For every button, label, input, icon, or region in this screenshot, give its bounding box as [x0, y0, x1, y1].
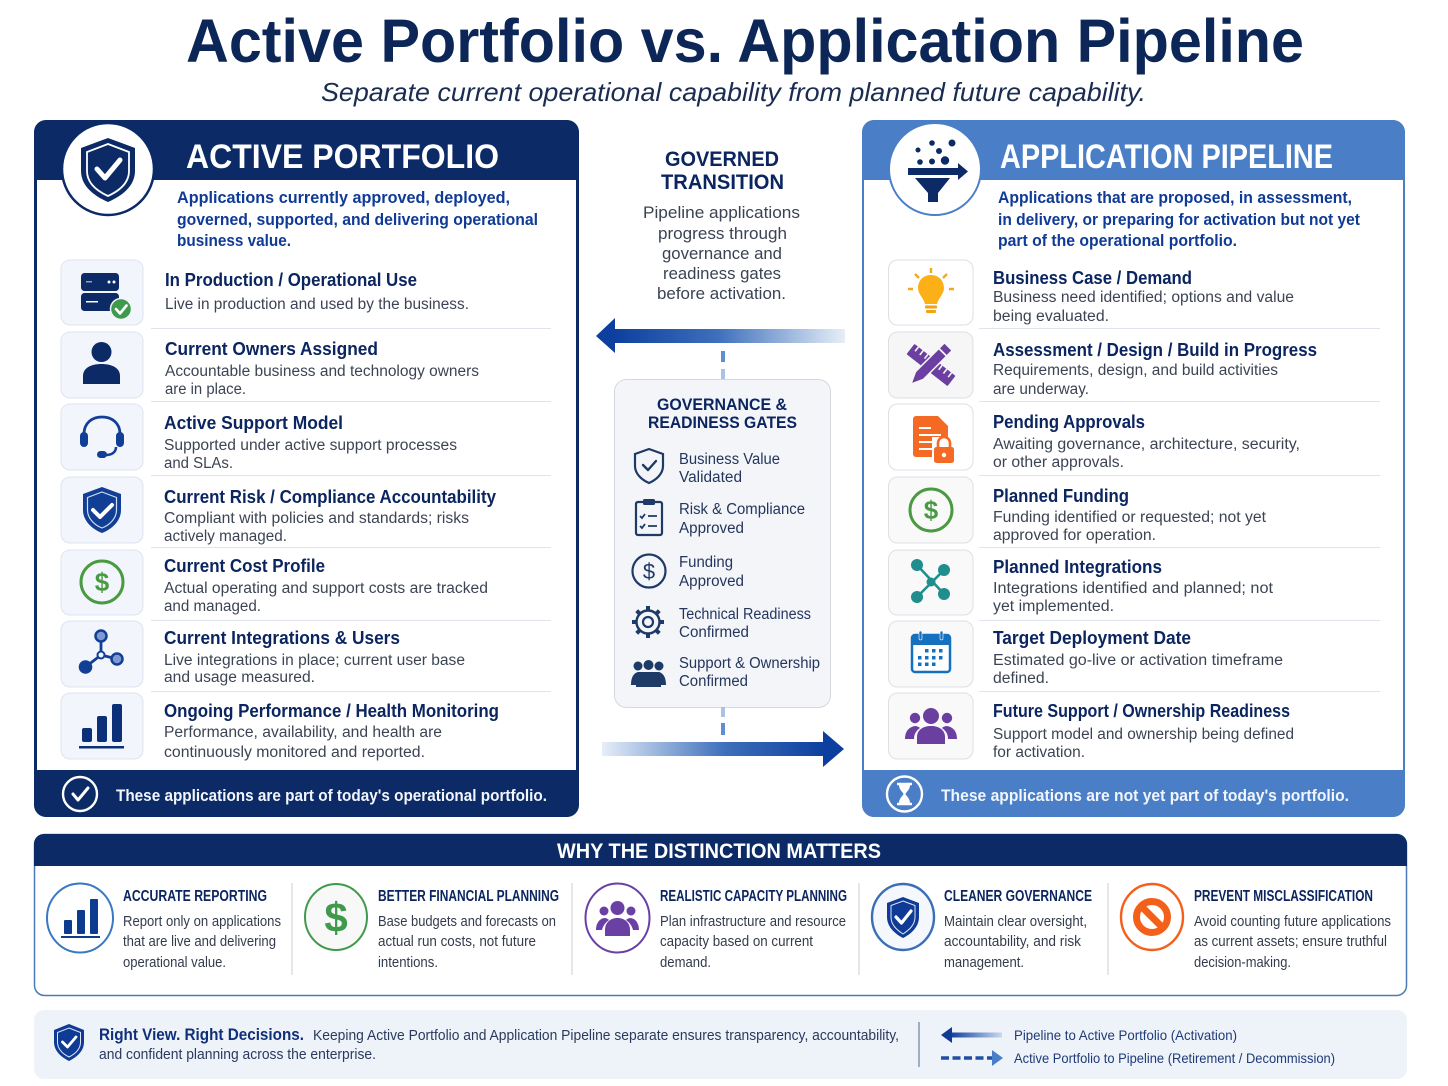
gate: funding: [632, 554, 744, 590]
heading: application pipeline: APPLICATION PIPELINE: [1000, 138, 1333, 176]
icon: document lock: [913, 416, 956, 464]
item: realistic capacity planning: demand.: [660, 955, 711, 971]
item: better financial planning: intentions.: [378, 955, 438, 971]
icon: shield badge: [62, 123, 154, 215]
row: performance: Performance, availability, and health are: [164, 724, 442, 741]
heading: governed transition: [661, 147, 784, 194]
item: cleaner governance: CLEANER GOVERNANCE: [944, 888, 1092, 905]
row: assessment design build: are underway.: [993, 381, 1089, 398]
row: assessment design build: Requirements, design, and build activities: [993, 362, 1278, 379]
panel: governance gates: [614, 380, 830, 708]
row: future support: [888, 693, 1294, 761]
row: current owners: [61, 332, 479, 398]
item: realistic capacity planning: Plan infrastructure and resource: [660, 914, 846, 930]
icon: footer shield: [54, 1024, 84, 1061]
row: risk compliance: actively managed.: [164, 528, 287, 545]
row: planned integrations: Integrations identified and planned; not: [993, 580, 1274, 597]
arrow: pipeline to active portfolio: [596, 318, 845, 353]
text: transition description: [643, 204, 800, 303]
row: business case: being evaluated.: [993, 308, 1109, 325]
gate: technical readiness: Technical Readiness: [679, 606, 811, 623]
panel: application pipeline: [862, 120, 1405, 817]
row: future support: Future Support / Ownership Readiness: [993, 701, 1290, 721]
icon: dollar: [910, 489, 952, 531]
row: performance: [61, 693, 499, 761]
gate: business value: Business Value: [679, 451, 780, 468]
row: in production: Live in production and used by the business.: [165, 296, 469, 313]
row: risk compliance: [61, 477, 496, 545]
item: prevent misclassification: PREVENT MISCLASSIFICATION: [1194, 888, 1373, 905]
text: right view statement: and confident planning across the enterprise.: [99, 1047, 376, 1063]
gate: risk compliance: [636, 499, 805, 537]
row: active support: [61, 404, 457, 472]
gate: funding: Approved: [679, 573, 744, 590]
heading: governed transition: GOVERNED: [665, 147, 779, 171]
icon: light bulb: [908, 268, 954, 313]
text: active portfolio definition: Applications currently approved, deployed,: [177, 189, 510, 207]
row: business case: [888, 260, 1294, 325]
item: better financial planning: Base budgets and forecasts on: [378, 914, 556, 930]
row: planned funding: approved for operation.: [993, 527, 1156, 544]
arrow: active portfolio to pipeline: [602, 731, 844, 767]
connector: bottom dashes: [721, 707, 725, 735]
gate: risk compliance: Risk & Compliance: [679, 501, 805, 518]
row: integrations: and usage measured.: [164, 669, 315, 686]
footer text: active portfolio: These applications are part of today's operational portfolio.: [116, 787, 547, 805]
row: performance: Ongoing Performance / Health Monitoring: [164, 701, 499, 721]
row: pending approvals: [888, 404, 1300, 471]
row: integrations: Current Integrations & Users: [164, 628, 400, 648]
item: better financial planning: actual run costs, not future: [378, 934, 536, 950]
text: transition description: progress through: [658, 225, 787, 243]
legend: retirement: Active Portfolio to Pipeline (Retirement / Decommission): [1014, 1050, 1335, 1066]
row: cost profile: and managed.: [164, 598, 261, 615]
item: accurate reporting: operational value.: [123, 955, 226, 971]
row: active support: and SLAs.: [164, 455, 233, 472]
row: assessment design build: [888, 332, 1317, 398]
row: future support: for activation.: [993, 744, 1085, 761]
icon: person: [83, 342, 120, 384]
row: planned funding: Funding identified or requested; not yet: [993, 509, 1267, 526]
icon: headset: [80, 417, 124, 458]
row: planned integrations: [888, 550, 1274, 615]
row: pending approvals: Awaiting governance, architecture, security,: [993, 436, 1300, 453]
text: active portfolio definition: governed, supported, and delivering operational: [177, 211, 538, 229]
row: risk compliance: Current Risk / Compliance Accountability: [164, 487, 496, 507]
row: target deployment: Estimated go-live or activation timeframe: [993, 652, 1283, 669]
row: integrations: [61, 621, 465, 687]
gate: funding: $: [643, 559, 655, 584]
text: active portfolio definition: [177, 189, 538, 250]
row: planned funding: Planned Funding: [993, 486, 1129, 506]
text: application pipeline definition: part of the operational portfolio.: [998, 232, 1237, 250]
row: current owners: are in place.: [165, 381, 246, 398]
icon: hourglass: [887, 776, 922, 812]
text: application pipeline definition: Applications that are proposed, in assessment,: [998, 189, 1352, 207]
footer text: application pipeline: These applications are not yet part of today's portfolio.: [941, 787, 1349, 805]
icon: calendar: [912, 631, 950, 672]
icon: server with check: [81, 273, 132, 320]
row: target deployment: [888, 621, 1283, 687]
row: cost profile: [61, 550, 488, 615]
row: pending approvals: Pending Approvals: [993, 412, 1145, 432]
text: transition description: governance and: [662, 245, 782, 263]
icon: footer check: [63, 777, 97, 811]
row: active support: Active Support Model: [164, 413, 343, 433]
gate: technical readiness: [632, 606, 811, 641]
row: cost profile: Actual operating and support costs are tracked: [164, 580, 488, 597]
icon: dollar: [81, 561, 123, 603]
icon: dollar: $: [95, 567, 110, 597]
item: realistic capacity planning: [586, 884, 847, 971]
panel: right view footer: [34, 1010, 1407, 1079]
text: right view statement: Keeping Active Portfolio and Application Pipeline separate ensures transparency, accountability,: [313, 1028, 899, 1044]
icon: funnel badge: [889, 123, 981, 215]
text: right view statement: Right View. Right Decisions.: [99, 1026, 304, 1044]
gate: business value: [635, 449, 780, 486]
connector: top dashes: [721, 351, 725, 379]
item: better financial planning: BETTER FINANCIAL PLANNING: [378, 888, 559, 905]
gate: risk compliance: Approved: [679, 520, 744, 537]
item: better financial planning: [305, 884, 559, 971]
gate: support ownership: [631, 655, 820, 690]
row: business case: Business need identified; options and value: [993, 289, 1294, 306]
heading: active portfolio: ACTIVE PORTFOLIO: [186, 138, 499, 176]
row: planned integrations: yet implemented.: [993, 598, 1114, 615]
item: accurate reporting: [47, 884, 281, 971]
heading: why the distinction matters: WHY THE DISTINCTION MATTERS: [557, 840, 881, 863]
item: accurate reporting: ACCURATE REPORTING: [123, 888, 267, 905]
icon: dollar: $: [924, 495, 939, 525]
item: accurate reporting: that are live and delivering: [123, 934, 276, 950]
icon: network: [79, 630, 122, 674]
heading: governed transition: TRANSITION: [661, 170, 784, 194]
item: prevent misclassification: [1121, 884, 1391, 971]
item: accurate reporting: Report only on applications: [123, 914, 281, 930]
icon: teal network: [911, 559, 950, 603]
gate: business value: Validated: [679, 469, 742, 486]
row: business case: Business Case / Demand: [993, 268, 1192, 288]
heading: gates: GOVERNANCE &: [657, 396, 787, 414]
row: planned integrations: Planned Integrations: [993, 557, 1162, 577]
gate: support ownership: Support & Ownership: [679, 655, 820, 672]
row: cost profile: Current Cost Profile: [164, 556, 325, 576]
row: future support: Support model and ownership being defined: [993, 726, 1294, 743]
row: current owners: Current Owners Assigned: [165, 339, 378, 359]
item: better financial planning: $: [324, 894, 348, 941]
gate: support ownership: Confirmed: [679, 673, 748, 690]
row: target deployment: Target Deployment Date: [993, 628, 1191, 648]
heading: gates: [648, 396, 797, 432]
icon: bar chart: [79, 704, 124, 748]
icon: pencil and ruler: [907, 343, 955, 388]
heading: gates: READINESS GATES: [648, 414, 797, 432]
item: realistic capacity planning: REALISTIC CAPACITY PLANNING: [660, 888, 847, 905]
icon: purple people: [905, 708, 957, 744]
item: cleaner governance: management.: [944, 955, 1024, 971]
row: in production: [61, 260, 469, 325]
text: transition description: Pipeline applications: [643, 204, 800, 222]
subtitle: Separate current operational capability from planned future capability.: [321, 77, 1146, 107]
gate: technical readiness: Confirmed: [679, 624, 749, 641]
row: performance: continuously monitored and reported.: [164, 744, 425, 761]
item: cleaner governance: Maintain clear oversight,: [944, 914, 1087, 930]
row: active support: Supported under active support processes: [164, 437, 457, 454]
row: assessment design build: Assessment / Design / Build in Progress: [993, 340, 1317, 360]
icon: shield: [83, 487, 121, 533]
item: cleaner governance: accountability, and risk: [944, 934, 1082, 950]
row: in production: In Production / Operational Use: [165, 270, 417, 290]
text: active portfolio definition: business value.: [177, 232, 291, 250]
text: application pipeline definition: [998, 189, 1360, 250]
legend: activation: Pipeline to Active Portfolio (Activation): [1014, 1027, 1237, 1043]
item: prevent misclassification: decision-making.: [1194, 955, 1291, 971]
title: Active Portfolio vs. Application Pipeline: [186, 7, 1304, 75]
text: transition description: before activation.: [657, 285, 786, 303]
row: target deployment: defined.: [993, 670, 1049, 687]
row: risk compliance: Compliant with policies and standards; risks: [164, 510, 469, 527]
row: planned funding: [888, 477, 1267, 544]
text: right view statement: [99, 1026, 899, 1063]
row: integrations: Live integrations in place; current user base: [164, 652, 465, 669]
text: application pipeline definition: in delivery, or preparing for activation but not yet: [998, 211, 1360, 229]
item: prevent misclassification: as current assets; ensure truthful: [1194, 934, 1387, 950]
item: prevent misclassification: Avoid counting future applications: [1194, 914, 1391, 930]
panel: governed transition: [596, 147, 845, 767]
panel: active portfolio: [34, 120, 579, 817]
panel: why the distinction matters: [34, 834, 1407, 996]
item: cleaner governance: [872, 884, 1092, 971]
row: current owners: Accountable business and technology owners: [165, 363, 479, 380]
item: realistic capacity planning: capacity based on current: [660, 934, 813, 950]
row: pending approvals: or other approvals.: [993, 454, 1124, 471]
gate: funding: Funding: [679, 554, 733, 571]
text: transition description: readiness gates: [663, 265, 781, 283]
